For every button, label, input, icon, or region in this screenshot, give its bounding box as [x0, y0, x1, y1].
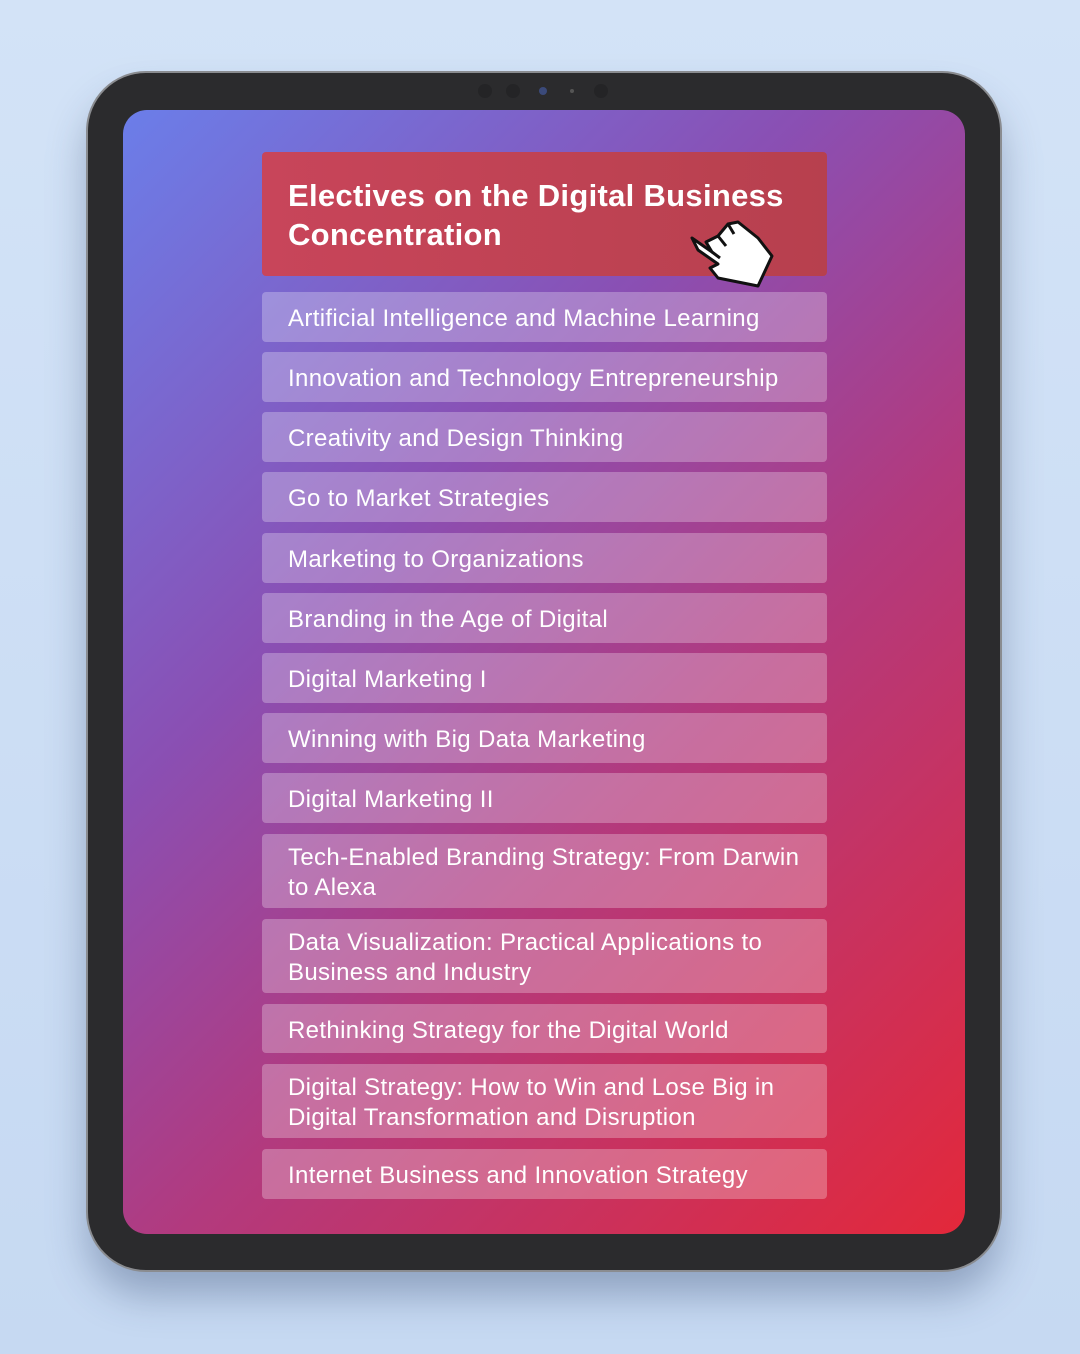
tablet — [88, 73, 1000, 1270]
text: Internet Business and Innovation Strategy — [288, 1162, 748, 1189]
text: Innovation and Technology Entrepreneurship — [288, 365, 779, 392]
title — [262, 152, 827, 276]
text: Tech-Enabled Branding Strategy: From Darwin — [288, 844, 799, 871]
list items — [262, 292, 827, 342]
icon: pointing hand — [690, 220, 774, 288]
text: Digital Strategy: How to Win and Lose Big in — [288, 1074, 774, 1101]
text: Go to Market Strategies — [288, 485, 550, 512]
title: Electives on the Digital Business Concentration — [288, 178, 784, 252]
text: Creativity and Design Thinking — [288, 425, 624, 452]
text: Business and Industry — [288, 959, 531, 986]
text: Digital Marketing I — [288, 666, 487, 693]
list items: Artificial Intelligence and Machine Learning — [288, 305, 760, 332]
text: to Alexa — [288, 874, 376, 901]
screen — [123, 110, 965, 1234]
text: Winning with Big Data Marketing — [288, 726, 646, 753]
camera — [539, 87, 574, 95]
text: Branding in the Age of Digital — [288, 606, 608, 633]
text: Digital Marketing II — [288, 786, 494, 813]
text: Data Visualization: Practical Applications to — [288, 929, 762, 956]
text: Marketing to Organizations — [288, 546, 584, 573]
text: Digital Transformation and Disruption — [288, 1104, 696, 1131]
text: Rethinking Strategy for the Digital World — [288, 1016, 729, 1044]
